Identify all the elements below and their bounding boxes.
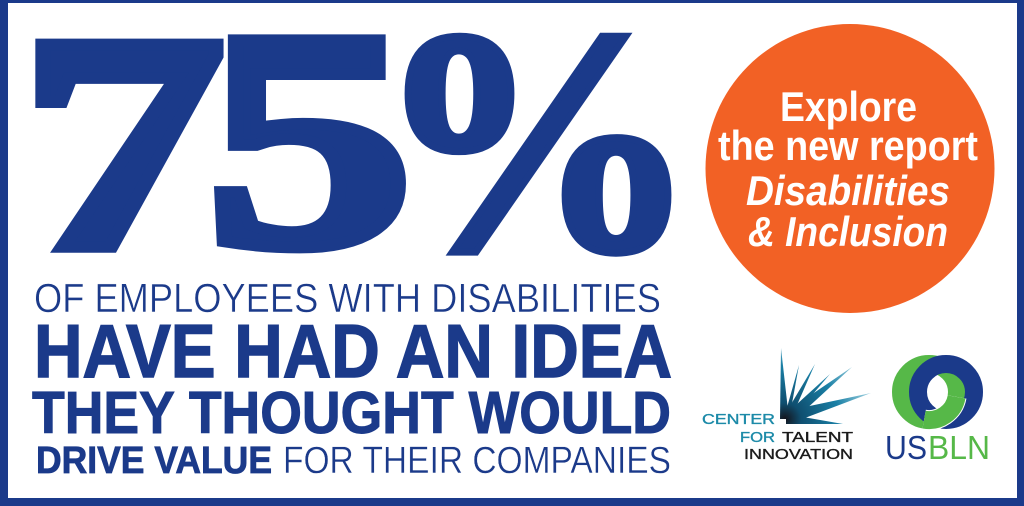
logo wordmark: FOR <box>740 430 775 446</box>
callout: orange circle <box>706 24 994 313</box>
line: drive value for their companies: FOR THEIR COMPANIES <box>283 440 671 482</box>
logo wordmark <box>885 429 990 466</box>
icon: starburst <box>780 348 871 424</box>
line: they thought would: THEY THOUGHT WOULD <box>32 380 671 446</box>
callout text: explore: Explore <box>780 83 917 130</box>
headline statistic: 75% <box>20 0 698 319</box>
statement text <box>32 275 672 482</box>
callout text: and inclusion: & Inclusion <box>748 208 948 255</box>
logo: center for talent innovation <box>702 348 871 463</box>
logo wordmark: TALENT <box>782 430 853 446</box>
logo wordmark: US <box>885 429 927 466</box>
logo wordmark: BLN <box>928 429 990 466</box>
line: drive value for their companies <box>36 440 671 482</box>
line: drive value for their companies: DRIVE VALUE <box>36 440 272 482</box>
logo wordmark <box>702 412 853 463</box>
callout text: the new report: the new report <box>718 122 978 169</box>
line: have had an idea: HAVE HAD AN IDEA <box>34 309 672 393</box>
icon: interlocking rings <box>901 364 974 420</box>
line: of employees with disabilities: OF EMPLOYEES WITH DISABILITIES <box>34 275 661 321</box>
logo wordmark: CENTER <box>702 412 775 428</box>
logo wordmark: INNOVATION <box>744 447 853 463</box>
logo: usbln <box>885 364 990 466</box>
callout text: disabilities: Disabilities <box>746 167 950 214</box>
